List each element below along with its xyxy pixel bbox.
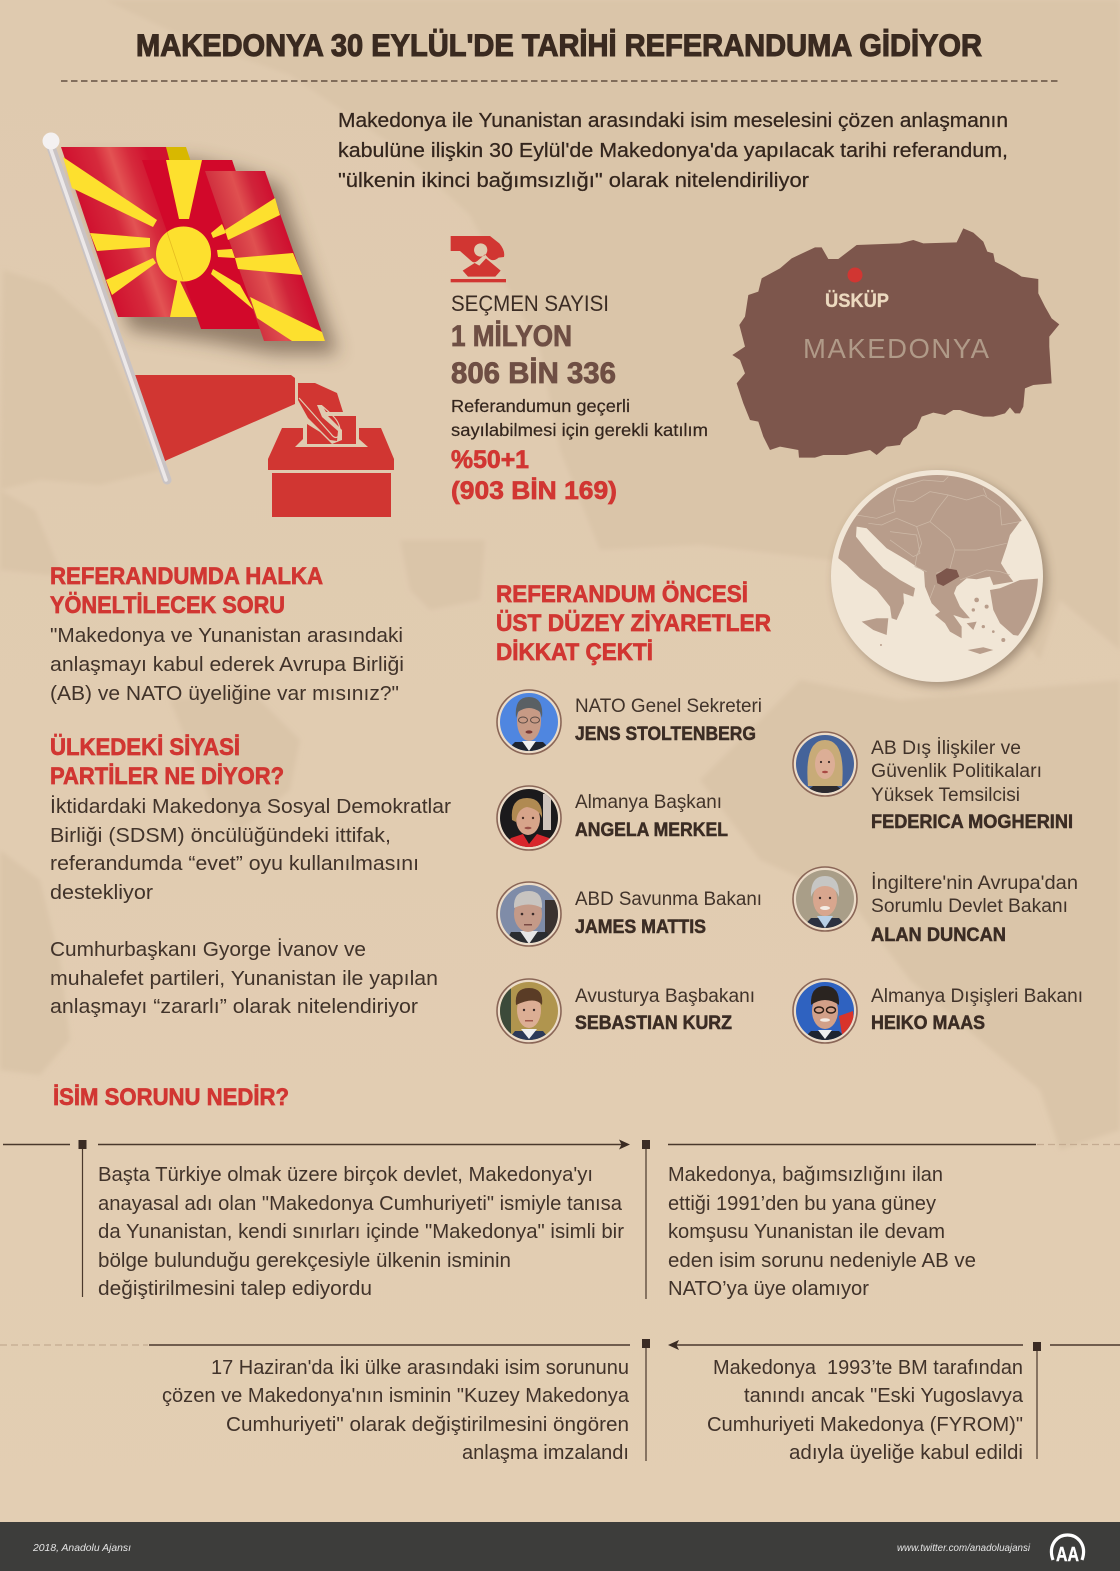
timeline step 1: bölge bulunduğu gerekçesiyle ülkenin isminin (98, 1249, 511, 1272)
voter stats (451, 291, 708, 505)
timeline step 1 (3, 1140, 624, 1300)
intro text: "ülkenin ikinci bağımsızlığı" olarak nitelendiriliyor (338, 170, 809, 192)
voter stats: Referandumun geçerli (451, 396, 630, 416)
timeline step 1: değiştirilmesini talep ediyordu (98, 1277, 372, 1300)
text: political parties: destekliyor (50, 881, 153, 904)
label: Sebastian Kurz: Avusturya Başbakanı (575, 986, 755, 1007)
text: political parties: Cumhurbaşkanı Gyorge İvanov ve (50, 938, 366, 961)
sun (156, 226, 211, 282)
timeline step 4: Cumhuriyeti" olarak değiştirilmesini öngören (226, 1413, 629, 1436)
label: Angela Merkel: ANGELA MERKEL (575, 820, 728, 841)
footer (0, 1522, 1120, 1571)
portrait: Alan Duncan (793, 867, 857, 931)
heading: high level visits: DİKKAT ÇEKTİ (496, 639, 653, 666)
map: Macedonia: ÜSKÜP (825, 291, 889, 312)
label: Alan Duncan: Sorumlu Devlet Bakanı (871, 896, 1068, 917)
timeline step 2 (642, 1140, 1120, 1300)
heading: referendum question (50, 563, 323, 619)
icon: macedonian flag on pole (42, 132, 338, 480)
label: Federica Mogherini: Güvenlik Politikaları (871, 761, 1042, 782)
timeline step 1: da Yunanistan, kendi sınırları içinde "Makedonya" isimli bir (98, 1220, 624, 1243)
portrait: Angela Merkel (497, 786, 561, 850)
icon: ballot hand and box (130, 375, 394, 517)
heading: high level visits (496, 581, 771, 666)
text: political parties: muhalefet partileri, Yunanistan ile yapılan (50, 967, 438, 990)
text: political parties: Birliği (SDSM) öncülüğündeki ittifak, (50, 824, 391, 847)
timeline step 1: anayasal adı olan "Makedonya Cumhuriyeti" ismiyle tanısa (98, 1192, 623, 1215)
label: Heiko Maas: HEIKO MAAS (871, 1013, 985, 1034)
intro text (338, 110, 1008, 192)
arrow: step 1 to step 2 (98, 1140, 630, 1150)
arrow: step 3 to step 4 (668, 1340, 1023, 1350)
flag pole (42, 132, 167, 480)
voter stats: SEÇMEN SAYISI (451, 291, 609, 316)
label: Angela Merkel: Almanya Başkanı (575, 792, 722, 813)
text: political parties: referandumda “evet” oyu kullanılmasını (50, 852, 419, 875)
timeline step 4: anlaşma imzalandı (462, 1441, 629, 1464)
locator globe (827, 460, 1067, 686)
title: MAKEDONYA 30 EYLÜL'DE TARİHİ REFERANDUMA GİDİYOR (136, 27, 982, 63)
heading: political parties: ÜLKEDEKİ SİYASİ (50, 734, 240, 761)
label: Heiko Maas (871, 986, 1083, 1034)
map: Macedonia (732, 228, 1059, 458)
flag panel 1 (61, 147, 210, 317)
footer: www.twitter.com/anadoluajansi (897, 1542, 1031, 1554)
heading: high level visits: REFERANDUM ÖNCESİ (496, 581, 748, 608)
timeline step 4: çözen ve Makedonya'nın isminin "Kuzey Makedonya (162, 1384, 630, 1407)
heading: political parties (50, 734, 284, 790)
heading: name issue: İSİM SORUNU NEDİR? (53, 1084, 289, 1111)
label: Federica Mogherini: AB Dış İlişkiler ve (871, 738, 1021, 759)
text: referendum question (50, 624, 404, 705)
voter stats: 806 BİN 336 (451, 357, 616, 390)
timeline step 2: komşusu Yunanistan ile devam (668, 1220, 945, 1243)
heading: political parties: PARTİLER NE DİYOR? (50, 763, 284, 790)
timeline step 2: ettiği 1991’den bu yana güney (668, 1192, 937, 1215)
label: Alan Duncan: İngiltere'nin Avrupa'dan (871, 873, 1078, 894)
voter stats: %50+1 (451, 446, 529, 474)
intro text: Makedonya ile Yunanistan arasındaki isim meselesini çözen anlaşmanın (338, 110, 1008, 132)
label: Sebastian Kurz: SEBASTIAN KURZ (575, 1013, 732, 1034)
text: political parties: İktidardaki Makedonya Sosyal Demokratlar (50, 795, 451, 818)
text: political parties (50, 795, 451, 1018)
timeline step 4: 17 Haziran'da İki ülke arasındaki isim sorununu (211, 1356, 629, 1379)
portrait: Sebastian Kurz (497, 979, 561, 1043)
label: James Mattis: JAMES MATTIS (575, 917, 706, 938)
label: Angela Merkel (575, 792, 728, 841)
label: Federica Mogherini: Yüksek Temsilcisi (871, 785, 1020, 806)
label: Jens Stoltenberg (575, 696, 762, 745)
flag panel 3 (205, 171, 325, 341)
flag panel 2 (142, 160, 290, 329)
timeline step 2: NATO’ya üye olamıyor (668, 1277, 869, 1300)
label: Sebastian Kurz (575, 986, 755, 1034)
label: James Mattis (575, 889, 762, 938)
label: Jens Stoltenberg: JENS STOLTENBERG (575, 724, 756, 745)
voter stats: (903 BİN 169) (451, 477, 617, 505)
label: Alan Duncan: ALAN DUNCAN (871, 925, 1006, 946)
portrait: Jens Stoltenberg (497, 690, 561, 754)
icon: AA logo (1051, 1535, 1084, 1566)
icon: voter (451, 236, 506, 282)
portrait: Heiko Maas (793, 979, 857, 1043)
heading: high level visits: ÜST DÜZEY ZİYARETLER (496, 610, 771, 637)
timeline step 3: Makedonya 1993’te BM tarafından (713, 1356, 1023, 1379)
heading: referendum question: REFERANDUMDA HALKA (50, 563, 323, 590)
label: Federica Mogherini: FEDERICA MOGHERINI (871, 812, 1073, 833)
text: political parties: anlaşmayı “zararlı” olarak nitelendiriyor (50, 995, 418, 1018)
footer: 2018, Anadolu Ajansı (32, 1542, 131, 1554)
timeline step 3 (707, 1342, 1120, 1464)
intro text: kabulüne ilişkin 30 Eylül'de Makedonya'da yapılacak tarihi referandum, (338, 140, 1008, 162)
icon: AA logo: AA (1056, 1544, 1079, 1566)
label: James Mattis: ABD Savunma Bakanı (575, 889, 762, 910)
map: Macedonia: MAKEDONYA (803, 333, 990, 364)
label: Heiko Maas: Almanya Dışişleri Bakanı (871, 986, 1083, 1007)
text: referendum question: (AB) ve NATO üyeliğine var mısınız?" (50, 682, 399, 705)
timeline step 2: Makedonya, bağımsızlığını ilan (668, 1163, 943, 1186)
timeline step 1: Başta Türkiye olmak üzere birçok devlet, Makedonya'yı (98, 1163, 593, 1186)
voter stats: sayılabilmesi için gerekli katılım (451, 420, 708, 440)
timeline step 2: eden isim sorunu nedeniyle AB ve (668, 1249, 976, 1272)
label: Alan Duncan (871, 873, 1078, 946)
portrait: Federica Mogherini (793, 732, 857, 796)
voter stats: 1 MİLYON (451, 320, 572, 353)
timeline step 4 (0, 1339, 650, 1464)
timeline step 3: adıyla üyeliğe kabul edildi (789, 1441, 1023, 1464)
text: referendum question: anlaşmayı kabul ederek Avrupa Birliği (50, 653, 404, 676)
label: Jens Stoltenberg: NATO Genel Sekreteri (575, 696, 762, 717)
timeline step 3: Cumhuriyeti Makedonya (FYROM)" (707, 1413, 1023, 1436)
portrait: James Mattis (497, 882, 561, 946)
label: Federica Mogherini (871, 738, 1073, 833)
text: referendum question: "Makedonya ve Yunanistan arasındaki (50, 624, 403, 647)
timeline step 3: tanındı ancak "Eski Yugoslavya (744, 1384, 1024, 1407)
heading: referendum question: YÖNELTİLECEK SORU (50, 592, 285, 619)
